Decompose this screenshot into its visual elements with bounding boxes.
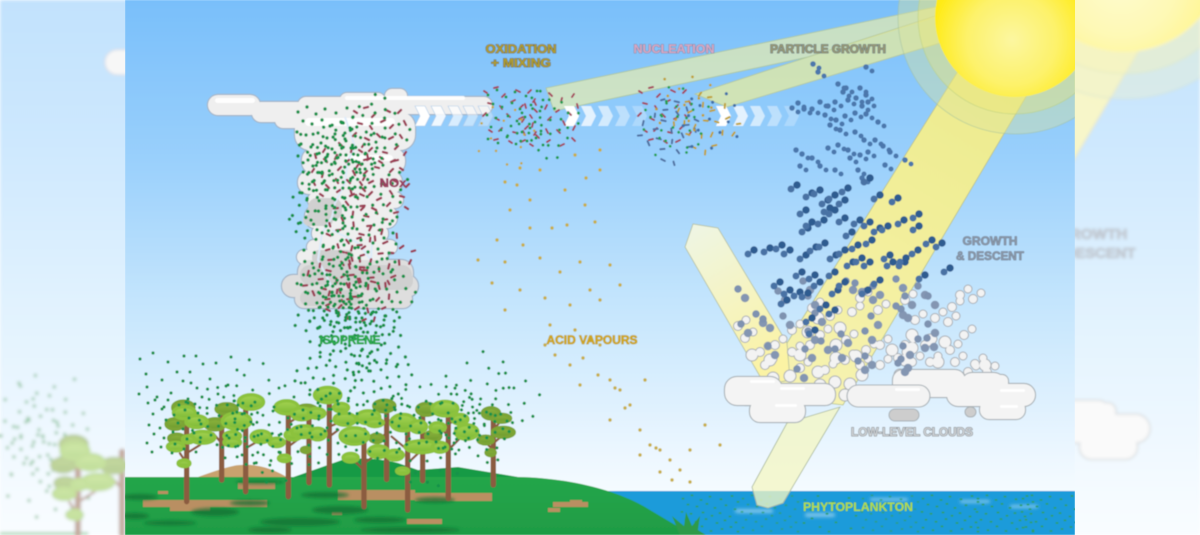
sea foam streaks (735, 498, 1038, 517)
lightning inside the cloud (318, 117, 372, 287)
label: particle growth: PARTICLE GROWTH (770, 42, 886, 56)
label: isoprene: ISOPRENE (320, 333, 380, 347)
white droplets behind low clouds (738, 289, 995, 395)
isoprene plumes rising through the cloud (289, 91, 419, 418)
small blue growing particles (792, 64, 911, 182)
fading blue-grey particles near cloud base (738, 279, 935, 378)
label: growth and descent (956, 234, 1025, 263)
low-level clouds (725, 370, 1035, 422)
label: NOx: NOx (380, 176, 407, 190)
label: low-level clouds: LOW-LEVEL CLOUDS (851, 425, 973, 439)
label: growth and descent: GROWTH (962, 234, 1018, 248)
sun ray to the nucleation region (694, 16, 940, 108)
bare earth patches (143, 483, 588, 524)
label: phytoplankton: PHYTOPLANKTON (803, 500, 913, 514)
tree trunks and branches (175, 398, 505, 510)
sun ray to the oxidation region (545, 6, 936, 112)
island ground (125, 477, 692, 535)
blurred enlarged backdrop behind the central panel: & DESCENT (1050, 245, 1136, 262)
nucleation cluster (636, 75, 742, 166)
NOx particles in the cloud (297, 107, 419, 332)
acid vapour droplets (478, 150, 720, 482)
forest (166, 387, 514, 510)
blurred enlarged backdrop behind the central panel: GROWTH (1058, 226, 1127, 243)
label: oxidation and mixing (486, 42, 556, 70)
label: oxidation and mixing: + MIXING (491, 56, 551, 70)
label: growth and descent: & DESCENT (956, 249, 1025, 263)
label: nucleation: NUCLEATION (634, 42, 714, 56)
reeds at the shoreline (672, 512, 706, 535)
wind chevrons toward particle growth (716, 106, 799, 126)
low-level transmitted sunbeam (752, 407, 840, 508)
tall storm cloud (208, 89, 492, 308)
darker blue growing particles (748, 178, 950, 334)
phytoplankton specks (682, 495, 1078, 532)
tree canopies, darker layer (166, 400, 514, 456)
wind chevrons toward nucleation (564, 106, 647, 126)
label: oxidation and mixing: OXIDATION (486, 42, 556, 56)
tan hill (198, 464, 286, 478)
sky (125, 0, 1075, 535)
tree canopies, lighter layer (167, 387, 478, 474)
label: acid vapours: ACID VAPOURS (546, 333, 638, 347)
main sunbeam (762, 60, 1030, 405)
sun with halo rings (898, 0, 1132, 134)
oxidation and mixing cluster (471, 87, 583, 169)
distant dark green hill (294, 458, 518, 478)
sea (600, 491, 1075, 535)
reflected sunbeam (685, 224, 790, 385)
wind chevrons inside the anvil (415, 106, 493, 126)
labels (320, 42, 1025, 514)
tree shadows on the ground (121, 480, 460, 533)
isoprene haze over the forest (139, 345, 546, 494)
